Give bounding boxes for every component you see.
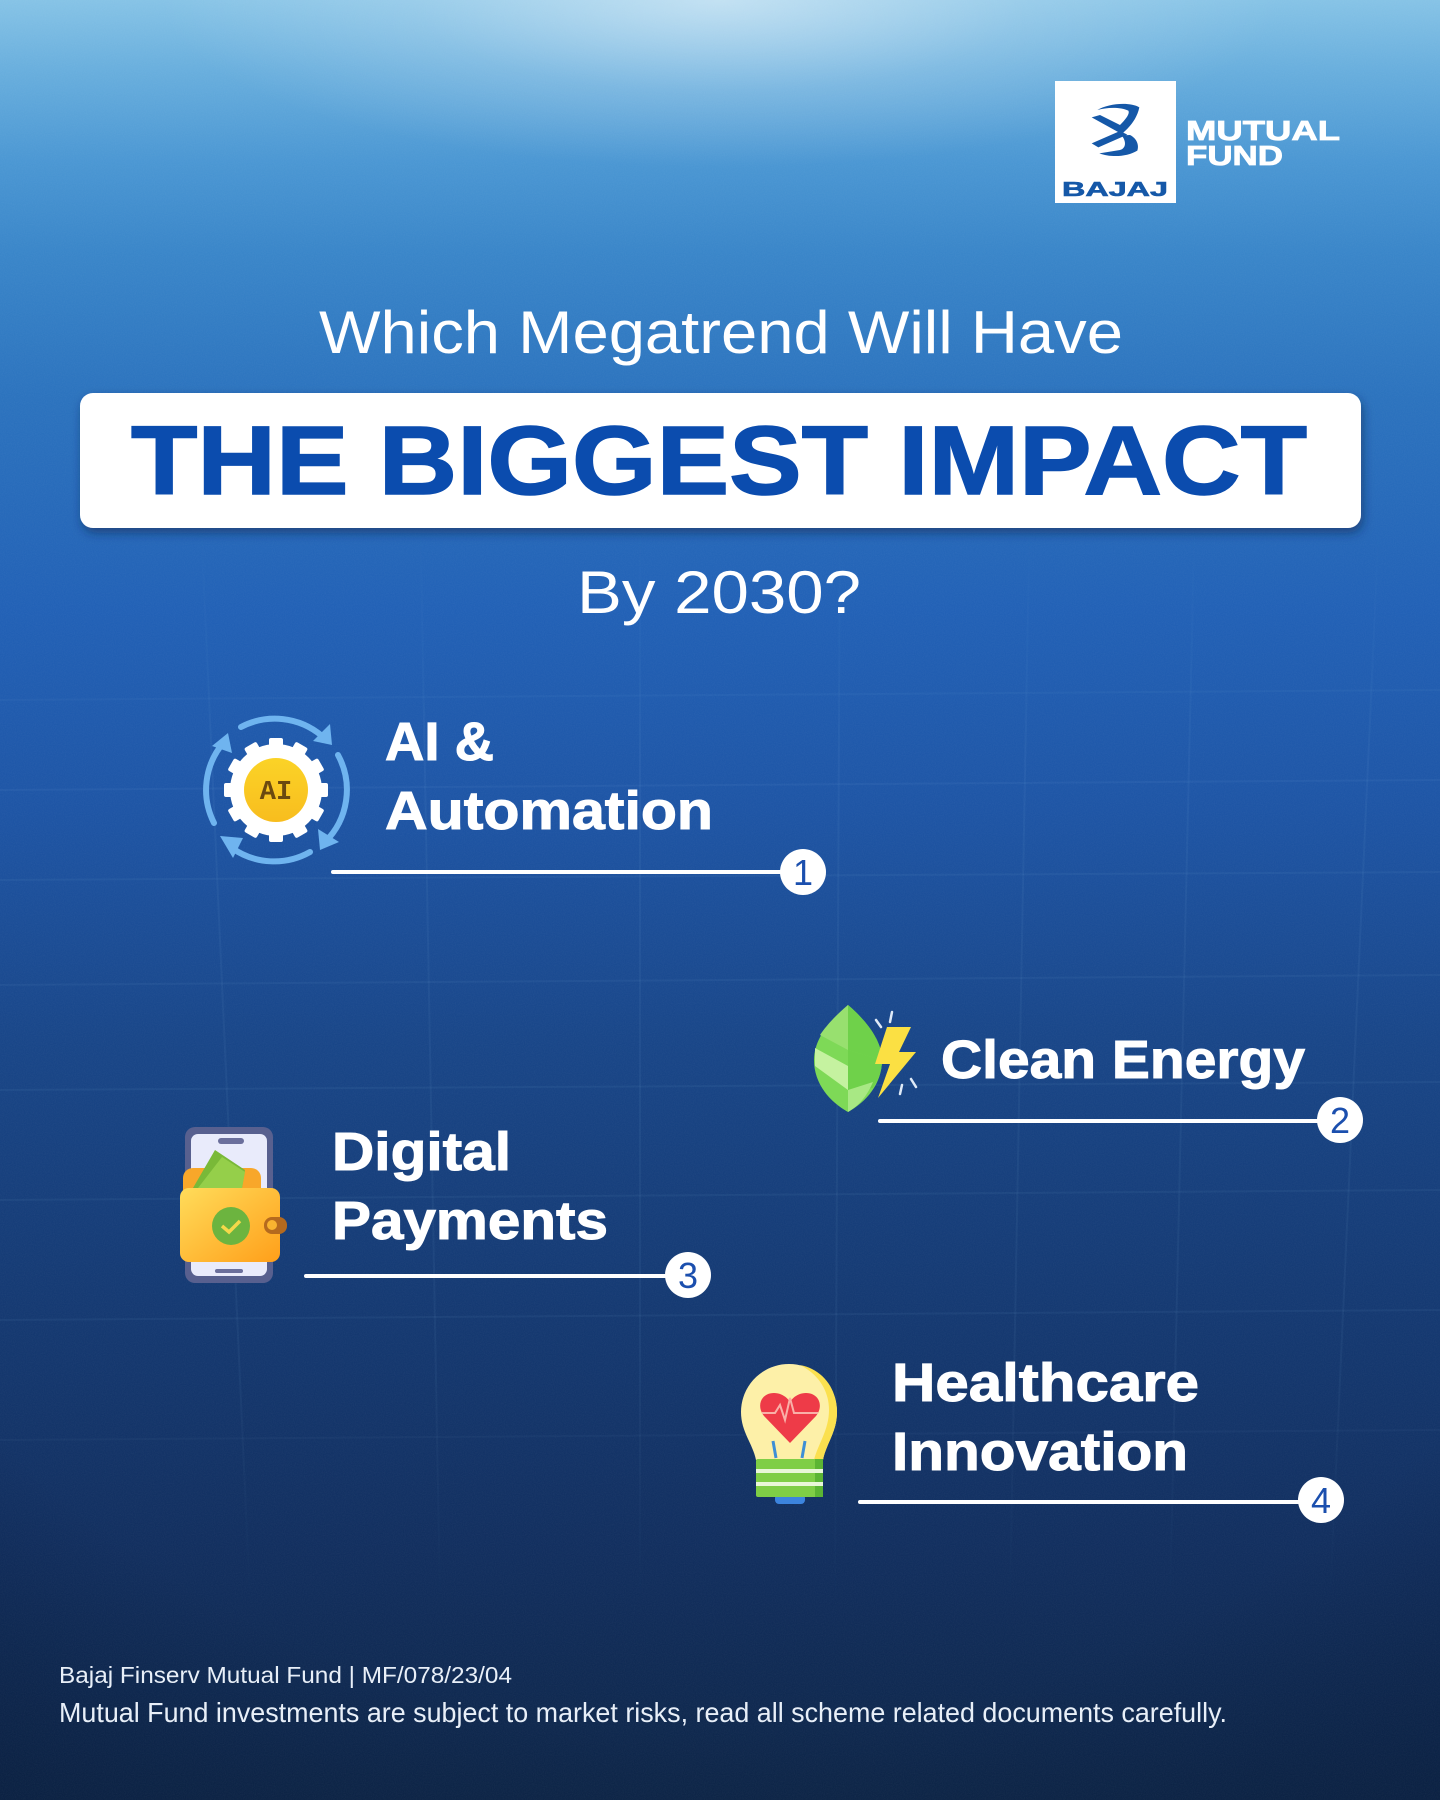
number badge 4: 4 (1311, 1480, 1331, 1521)
label: Innovation (892, 1422, 1188, 1482)
label (385, 712, 713, 841)
label: Digital (332, 1122, 511, 1182)
logo: Bajaj Mutual Fund (1055, 81, 1340, 203)
label: Payments (332, 1191, 608, 1251)
connector line (878, 1119, 1320, 1123)
label (892, 1353, 1199, 1482)
icon: AI gear with arrows (206, 719, 347, 861)
icon: AI gear with arrows: AI (260, 778, 292, 808)
footer disclaimer (59, 1662, 1227, 1728)
number badge 2 (1317, 1097, 1363, 1143)
heading: highlighted banner: THE BIGGEST IMPACT (131, 406, 1307, 515)
heading: highlighted banner (80, 393, 1361, 528)
label: Clean Energy (941, 1030, 1305, 1090)
number badge 1 (780, 849, 826, 895)
label: Healthcare (892, 1353, 1199, 1413)
icon: phone and wallet (180, 1127, 287, 1283)
item 3: Digital Payments (180, 1122, 711, 1298)
item 1: AI and Automation (206, 712, 826, 895)
number badge 3 (665, 1252, 711, 1298)
icon: Bajaj mark (1092, 104, 1139, 156)
number badge 2: 2 (1330, 1100, 1350, 1141)
number badge 3: 3 (678, 1255, 698, 1296)
label: AI & (385, 712, 494, 772)
footer disclaimer: Mutual Fund investments are subject to market risks, read all scheme related documents carefully. (59, 1697, 1227, 1728)
icon: light bulb with heart (741, 1364, 837, 1504)
number badge 1: 1 (793, 852, 813, 893)
item 4: Healthcare Innovation (741, 1353, 1344, 1523)
number badge 4 (1298, 1477, 1344, 1523)
connector line (304, 1274, 668, 1278)
BAJAJ wordmark: BAJAJ (1062, 179, 1168, 201)
Mutual Fund wordmark (1186, 115, 1340, 171)
heading: line one: Which Megatrend Will Have (319, 299, 1123, 366)
connector line (331, 870, 783, 874)
item 2: Clean Energy (814, 1005, 1363, 1143)
label (332, 1122, 608, 1251)
label: Automation (385, 781, 713, 841)
icon: leaf with lightning bolt (814, 1005, 916, 1112)
footer disclaimer: Bajaj Finserv Mutual Fund | MF/078/23/04 (59, 1662, 512, 1688)
heading: line three: By 2030? (577, 559, 861, 626)
Mutual Fund wordmark: FUND (1186, 140, 1283, 171)
Mutual Fund wordmark: MUTUAL (1186, 115, 1340, 146)
connector line (858, 1500, 1302, 1504)
